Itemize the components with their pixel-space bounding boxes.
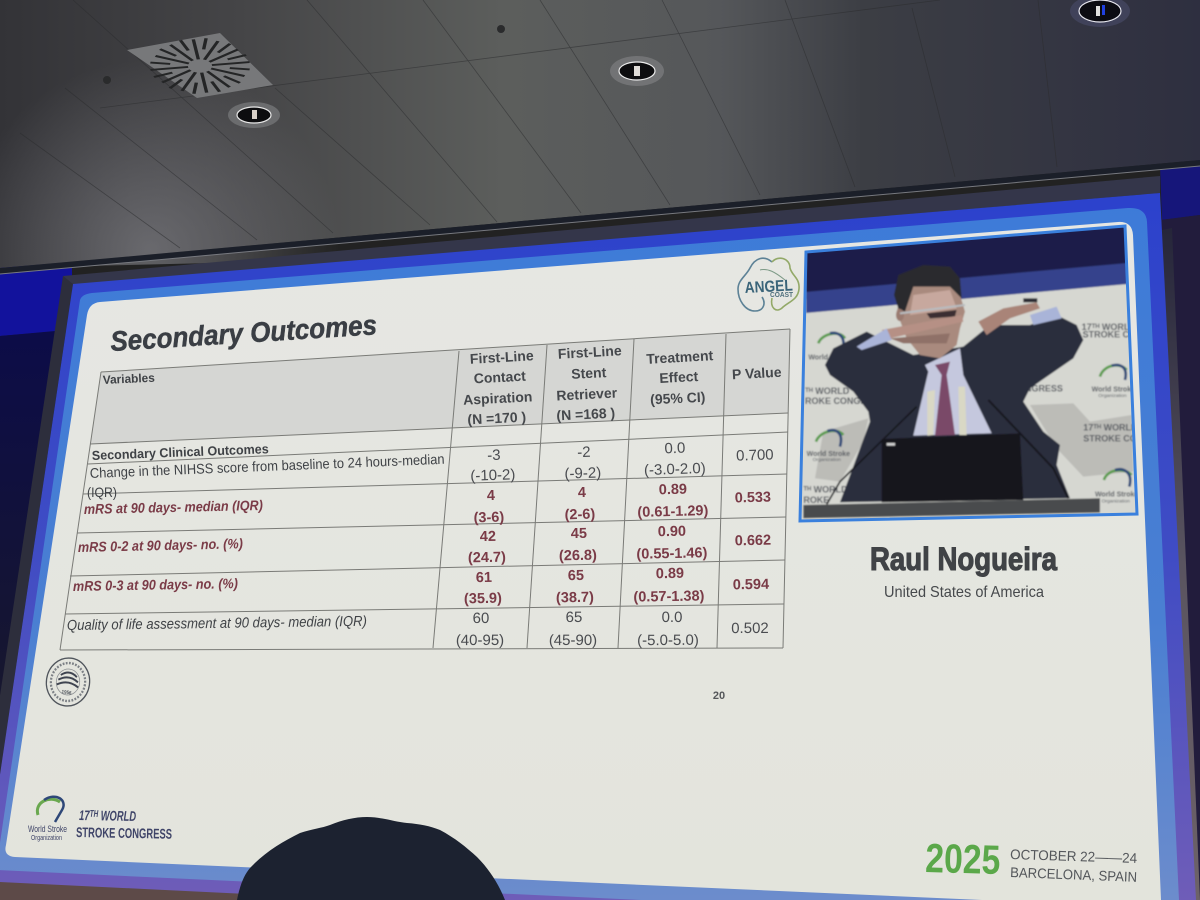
backdrop branding: [803, 322, 1135, 504]
Angel Coast logo: COAST: [770, 292, 794, 299]
mRS values: 42: [480, 529, 496, 545]
screen outer band: [0, 193, 1196, 900]
NIHSS and quality of life values: -2: [577, 444, 591, 461]
NIHSS and quality of life values: 65: [566, 609, 582, 626]
backdrop branding: World: [808, 354, 828, 361]
column headers: Treatment: [646, 347, 714, 367]
speaker Raul Nogueira: [803, 265, 1100, 518]
speaker country: United States of America: [884, 584, 1044, 601]
blue side wall, left: [0, 262, 72, 900]
column headers: Stent: [571, 364, 607, 382]
ceiling vent: [127, 33, 273, 98]
backdrop branding: 17ᵀᴴ WORLD: [1083, 423, 1138, 433]
row labels: Quality of life assessment at 90 days- median (IQR): [67, 614, 367, 634]
backdrop branding: Organization: [1102, 498, 1130, 504]
World Stroke Congress wordmark: 17ᵀᴴ WORLD: [79, 807, 136, 824]
Angel Coast logo: ANGEL: [744, 277, 793, 297]
World Stroke Organization logo: World Stroke: [28, 824, 67, 835]
outcomes table: mRS 0-2 at 90 days- no. (%): [78, 535, 243, 555]
column headers: Effect: [659, 368, 699, 386]
NIHSS and quality of life values: -3: [487, 447, 501, 464]
column headers: Retriever: [556, 385, 618, 403]
mRS values: 0.533: [735, 490, 771, 506]
page number: 20: [713, 690, 725, 702]
World Stroke Organization logo: Organization: [31, 833, 62, 842]
NIHSS and quality of life values: (40-95): [456, 632, 504, 649]
row labels: Change in the NIHSS score from baseline to 24 hours-median: [89, 451, 445, 481]
screen inner band: [0, 208, 1179, 900]
speaker name: Raul Nogueira: [870, 541, 1057, 577]
NIHSS and quality of life values: (-3.0-2.0): [644, 460, 706, 479]
mRS values: (24.7): [468, 550, 506, 566]
mRS values: 0.89: [656, 566, 684, 582]
backdrop branding: 17ᵀᴴ WORLD: [1082, 322, 1136, 332]
column headers: (95% CI): [650, 389, 706, 407]
backdrop branding: Organization: [1098, 393, 1127, 399]
backdrop branding: NGRESS: [1025, 384, 1063, 394]
ceiling light 3: [1070, 0, 1130, 27]
row labels: (IQR): [87, 484, 117, 500]
video frame: [800, 226, 1137, 521]
NIHSS and quality of life values: 0.502: [731, 620, 769, 637]
outcomes table: mRS 0-3 at 90 days- no. (%): [73, 575, 238, 594]
congress year: 2025: [925, 835, 1001, 883]
mRS values: [464, 482, 771, 607]
mRS values: 0.662: [735, 533, 771, 549]
blue side wall, right: [1160, 160, 1200, 900]
NIHSS and quality of life values: 60: [473, 610, 489, 627]
NIHSS and quality of life values: 0.0: [664, 440, 686, 457]
NIHSS and quality of life values: 0.700: [736, 446, 774, 465]
congress location: BARCELONA, SPAIN: [1010, 864, 1137, 885]
ceiling light 2: [610, 56, 664, 86]
sprinklers: [103, 25, 505, 84]
World Stroke Congress wordmark: STROKE CONGRESS: [76, 824, 172, 842]
mRS values: 65: [568, 568, 584, 584]
NIHSS and quality of life values: (45-90): [549, 632, 597, 649]
mRS values: 45: [571, 526, 587, 542]
backdrop branding: ᵀᴴ WORLD: [805, 386, 850, 396]
stage backdrop: [802, 283, 1136, 520]
column headers: First-Line: [469, 347, 534, 367]
mRS values: (0.57-1.38): [633, 588, 705, 606]
column headers: Aspiration: [463, 388, 533, 408]
outcomes table: mRS at 90 days- median (IQR): [84, 497, 263, 517]
NIHSS and quality of life values: (-5.0-5.0): [637, 632, 699, 649]
mRS values: (0.61-1.29): [637, 503, 709, 521]
NIHSS and quality of life values: 0.0: [662, 609, 682, 626]
mRS values: (3-6): [473, 510, 505, 526]
backdrop branding: World Stroke: [1092, 387, 1135, 394]
floor strip: [0, 878, 1200, 900]
ceiling light 1: [228, 102, 280, 128]
ceiling: [0, 0, 1200, 268]
column headers: [463, 342, 782, 427]
slide title: Secondary Outcomes: [109, 309, 378, 357]
backdrop branding: World Stroke: [807, 451, 850, 458]
slide background: [5, 222, 1162, 900]
mRS values: 0.594: [733, 577, 769, 593]
backdrop branding: STROKE CONGRESS: [1083, 329, 1174, 339]
column headers: Contact: [473, 368, 527, 386]
mRS values: 0.90: [658, 524, 686, 540]
backdrop branding: ᵀᴴ WORLD: [803, 485, 848, 495]
backdrop branding: World Stroke: [1095, 492, 1138, 499]
column headers: (N =170 ): [467, 409, 526, 427]
Angel Coast logo: [738, 258, 799, 311]
outcomes table: [60, 329, 790, 650]
backdrop branding: ROKE: [803, 495, 829, 505]
mRS values: (2-6): [564, 507, 596, 523]
NIHSS and quality of life values: [456, 440, 774, 649]
backdrop logos: [816, 333, 1132, 487]
mRS values: 61: [476, 570, 492, 586]
mRS values: (0.55-1.46): [636, 545, 708, 563]
row labels: Secondary Clinical Outcomes: [92, 441, 269, 463]
row labels: Variables: [103, 371, 155, 387]
mRS values: 0.89: [659, 482, 687, 498]
backdrop branding: ROKE CONGRESS: [805, 396, 885, 406]
mRS values: (38.7): [556, 590, 594, 606]
congress date: OCTOBER 22——24: [1010, 846, 1138, 866]
column headers: First-Line: [557, 342, 622, 362]
backdrop branding: Organization: [813, 457, 841, 463]
hospital seal: 1956: [61, 689, 72, 697]
NIHSS and quality of life values: (-9-2): [564, 464, 601, 483]
table rules: [60, 329, 790, 650]
NIHSS and quality of life values: (-10-2): [470, 466, 516, 485]
mRS values: (35.9): [464, 591, 502, 607]
audience head silhouette: [237, 817, 505, 900]
backdrop branding: STROKE CONGRESS: [1083, 433, 1175, 443]
hospital seal: [43, 655, 93, 709]
row labels: [67, 371, 445, 634]
backdrop shadows: [815, 403, 1133, 482]
mRS values: 4: [487, 488, 495, 504]
World Stroke Congress wordmark: [76, 807, 172, 842]
World Stroke Organization logo: [28, 797, 67, 842]
table header fill: [90, 329, 790, 444]
column headers: (N =168 ): [556, 405, 615, 423]
column headers: P Value: [732, 364, 782, 382]
mRS values: (26.8): [559, 548, 597, 564]
mRS values: 4: [578, 485, 586, 501]
speaker video panel: [798, 224, 1139, 522]
